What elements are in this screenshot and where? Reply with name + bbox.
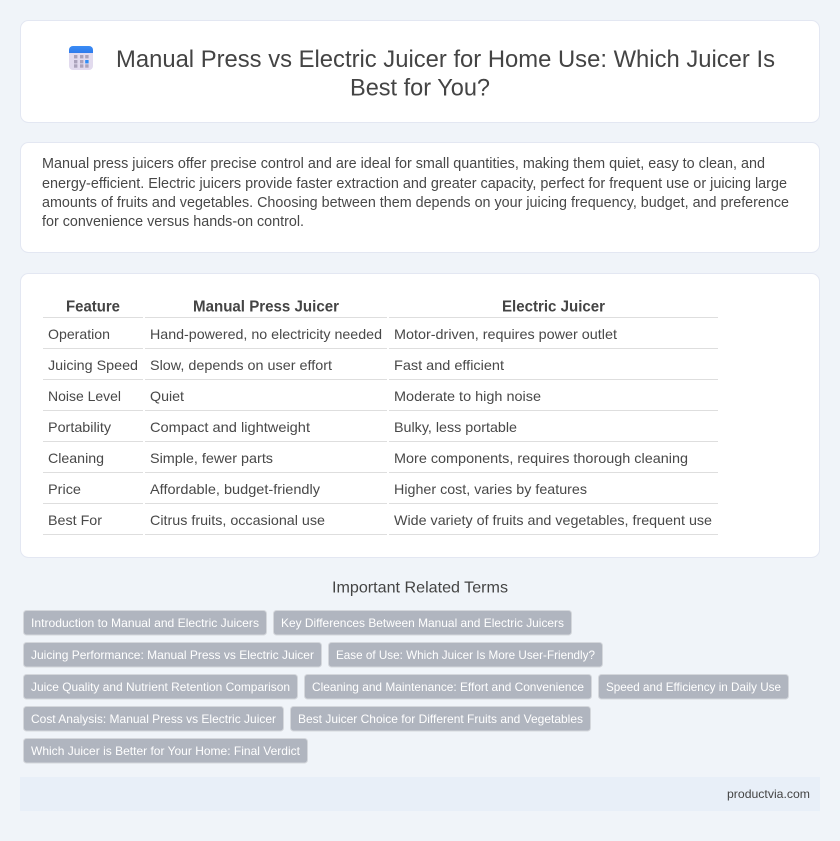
footer: productvia.com — [727, 787, 810, 801]
table row: juicing speed — [48, 357, 504, 373]
table row: cleaning: More components, requires thorough cleaning — [394, 450, 688, 466]
table row: operation — [48, 326, 617, 342]
text block: summary: amounts of fruits and vegetables. Choosing between them depends on your juicing frequency, budget, and preference — [42, 195, 789, 211]
table row: best for — [48, 512, 712, 528]
tag: Speed and Efficiency in Daily Use — [606, 680, 781, 694]
table row: cleaning: Simple, fewer parts — [150, 450, 273, 466]
table row: juicing speed: Slow, depends on user effort — [150, 357, 332, 373]
tag: Juicing Performance: Manual Press vs Electric Juicer — [31, 648, 314, 662]
table header row — [66, 298, 605, 316]
table row: cleaning: Cleaning — [48, 450, 104, 466]
table row: operation: Motor-driven, requires power outlet — [394, 326, 617, 342]
table row: noise level: Moderate to high noise — [394, 388, 541, 404]
table row: best for: Citrus fruits, occasional use — [150, 512, 325, 528]
table row: best for: Best For — [48, 512, 102, 528]
tag: Juice Quality and Nutrient Retention Comparison — [31, 680, 290, 694]
table row: price: Price — [48, 481, 81, 497]
tag: Cost Analysis: Manual Press vs Electric Juicer — [31, 712, 276, 726]
table row: portability: Compact and lightweight — [150, 419, 310, 435]
table row: portability: Bulky, less portable — [394, 419, 517, 435]
tag — [328, 642, 602, 667]
table row: juicing speed: Fast and efficient — [394, 357, 504, 373]
tag — [24, 706, 284, 731]
table row: portability — [48, 419, 517, 435]
table row: operation: Hand-powered, no electricity needed — [150, 326, 382, 342]
table row: price: Higher cost, varies by features — [394, 481, 587, 497]
table row: best for: Wide variety of fruits and vegetables, frequent use — [394, 512, 712, 528]
tag: Key Differences Between Manual and Electric Juicers — [281, 616, 564, 630]
title — [116, 46, 775, 102]
tag: Ease of Use: Which Juicer Is More User-Friendly? — [336, 648, 595, 662]
table row: juicing speed: Juicing Speed — [48, 357, 138, 373]
table row: price — [48, 481, 587, 497]
title: Best for You? — [350, 74, 490, 102]
text block: summary: for convenience versus hands-on control. — [42, 214, 304, 230]
tag — [24, 738, 308, 763]
tag — [304, 674, 592, 699]
panel: summary paragraph — [20, 142, 820, 252]
tag list: related terms — [24, 610, 788, 763]
tag — [290, 706, 590, 731]
panel: title header — [20, 20, 820, 122]
table header row: Feature — [66, 298, 120, 316]
title: Manual Press vs Electric Juicer for Home Use: Which Juicer Is — [116, 46, 775, 73]
icon: calendar — [69, 46, 93, 70]
table row: price: Affordable, budget-friendly — [150, 481, 320, 497]
table row: noise level: Noise Level — [48, 388, 121, 404]
table row: noise level — [48, 388, 541, 404]
tag — [274, 610, 572, 635]
table row: operation: Operation — [48, 326, 110, 342]
text block: summary: energy-efficient. Electric juicers provide faster extraction and greater capacity, perfect for frequent use or juicing large — [42, 176, 787, 192]
table row: cleaning — [48, 450, 688, 466]
tag — [24, 610, 266, 635]
tag: Best Juicer Choice for Different Fruits and Vegetables — [298, 712, 583, 726]
table header row: Electric Juicer — [502, 298, 605, 316]
table row: portability: Portability — [48, 419, 111, 435]
panel: comparison table — [20, 274, 820, 558]
heading: important related terms: Important Related Terms — [332, 580, 508, 596]
tag — [24, 674, 298, 699]
tag: Which Juicer is Better for Your Home: Final Verdict — [31, 744, 301, 758]
tag: Introduction to Manual and Electric Juicers — [31, 616, 259, 630]
text block: summary — [42, 156, 789, 230]
tag — [24, 642, 322, 667]
text block: summary: Manual press juicers offer precise control and are ideal for small quantities, making them quiet, easy to clean, and — [42, 156, 765, 172]
tag: Cleaning and Maintenance: Effort and Convenience — [312, 680, 584, 694]
table row: noise level: Quiet — [150, 388, 184, 404]
table header row: Manual Press Juicer — [193, 298, 339, 316]
footer — [20, 777, 820, 811]
tag — [598, 674, 788, 699]
